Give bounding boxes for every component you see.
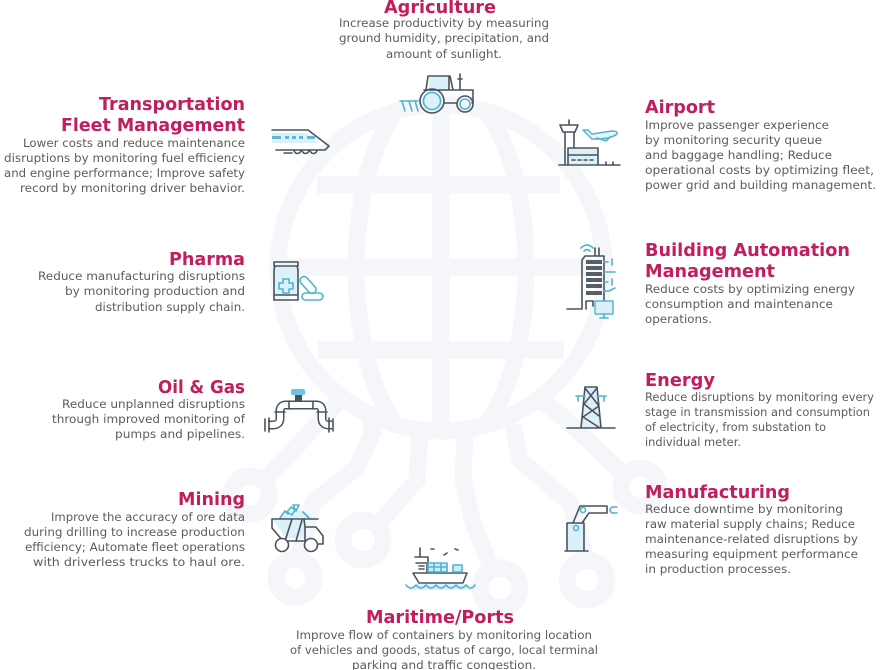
heading: Building Automation Management (645, 240, 850, 282)
text: Mining description: efficiency; Automate fleet operations (25, 540, 245, 554)
icon: pipeline valve (265, 389, 333, 432)
background globe with circuit lines (231, 83, 659, 608)
text: Energy description: stage in transmission and consumption (645, 405, 870, 419)
icon: transmission tower (567, 387, 615, 428)
text: Oil and Gas description: Reduce unplanned disruptions (62, 397, 245, 411)
text: Building description: Reduce costs by optimizing energy (645, 282, 855, 296)
text: Building description: consumption and maintenance (645, 297, 833, 311)
heading: Building Automation Management: Building Automation (645, 240, 850, 261)
heading: Energy: Energy (645, 370, 715, 391)
icon: mining truck (272, 505, 323, 552)
heading: Manufacturing: Manufacturing (645, 482, 790, 503)
heading: Transportation Fleet Management: Fleet Management (61, 115, 245, 136)
text: Transportation description: record by monitoring driver behavior. (20, 181, 245, 195)
text: Energy description: of electricity, from substation to (645, 420, 826, 434)
text: Energy description (645, 390, 874, 449)
text: Oil and Gas description: pumps and pipelines. (115, 427, 245, 441)
block: Building Automation Management (645, 240, 855, 326)
text: Manufacturing description (645, 502, 858, 576)
text: Transportation description: disruptions by monitoring fuel efficiency (4, 151, 245, 165)
text: Manufacturing description: raw material supply chains; Reduce (645, 517, 855, 531)
text: Agriculture description: ground humidity, precipitation, and (339, 31, 549, 45)
heading: Airport: Airport (645, 97, 715, 118)
text: Pharma description: by monitoring production and (65, 284, 245, 298)
text: Oil and Gas description: through improved monitoring of (52, 412, 246, 426)
icon: train (272, 130, 329, 154)
text: Transportation description: and engine performance; Improve safety (4, 166, 245, 180)
block: Oil & Gas (52, 377, 246, 441)
icon: airport tower and plane (559, 120, 620, 165)
text: Airport description: Improve passenger experience (645, 118, 829, 132)
text: Building description: operations. (645, 312, 712, 326)
text: Maritime description: Improve flow of containers by monitoring location (296, 628, 592, 642)
text: Manufacturing description: Reduce downtime by monitoring (645, 502, 843, 516)
heading: Transportation Fleet Management: Transportation (99, 94, 245, 115)
text: Mining description (24, 510, 245, 569)
heading: Mining: Mining (178, 489, 245, 510)
text: Energy description: Reduce disruptions by monitoring every (645, 390, 874, 404)
icon: smart building (567, 245, 615, 318)
text: Building description (645, 282, 855, 326)
text: Pharma description: Reduce manufacturing disruptions (38, 269, 245, 283)
block: Manufacturing (645, 482, 858, 576)
text: Agriculture description (339, 16, 549, 61)
text: Energy description: individual meter. (645, 435, 741, 449)
heading: Oil & Gas: Oil & Gas (158, 377, 245, 398)
text: Mining description: Improve the accuracy of ore data (51, 510, 245, 524)
text: Mining description: with driverless trucks to haul ore. (33, 555, 245, 569)
block: Airport (645, 97, 876, 192)
icon: cargo ship (406, 548, 475, 590)
block: Pharma (38, 249, 245, 314)
heading: Building Automation Management: Management (645, 261, 775, 282)
heading: Transportation Fleet Management (61, 94, 245, 136)
text: Manufacturing description: in production processes. (645, 562, 791, 576)
text: Airport description: operational costs by optimizing fleet, (645, 163, 874, 177)
block: Mining (24, 489, 245, 569)
text: Maritime description: of vehicles and goods, status of cargo, local terminal (290, 643, 598, 657)
text: Mining description: during drilling to increase production (24, 525, 245, 539)
icon: robotic arm (565, 506, 617, 551)
block: Energy (645, 370, 874, 449)
text: Transportation description: Lower costs and reduce maintenance (23, 136, 245, 150)
text: Manufacturing description: maintenance-related disruptions by (645, 532, 858, 546)
text: Airport description: by monitoring security queue (645, 133, 822, 147)
text: Pharma description: distribution supply chain. (95, 300, 245, 314)
text: Manufacturing description: measuring equipment performance (645, 547, 858, 561)
text: Pharma description (38, 269, 245, 314)
icon: tractor (400, 74, 473, 113)
block: Transportation Fleet Management (4, 94, 245, 195)
heading: Pharma: Pharma (169, 249, 245, 270)
text: Agriculture description: Increase productivity by measuring (339, 16, 549, 30)
text: Oil and Gas description (52, 397, 246, 441)
text: Airport description: power grid and building management. (645, 178, 876, 192)
icon: medicine bottle and pills (274, 262, 323, 300)
text: Maritime description (290, 628, 598, 670)
block: Agriculture (339, 0, 549, 61)
text: Airport description (645, 118, 876, 192)
block: Maritime/Ports (290, 607, 598, 670)
text: Airport description: and baggage handling; Reduce (645, 148, 832, 162)
heading: Maritime/Ports: Maritime/Ports (366, 607, 514, 628)
text: Transportation description (4, 136, 245, 195)
text: Agriculture description: amount of sunlight. (386, 47, 502, 61)
